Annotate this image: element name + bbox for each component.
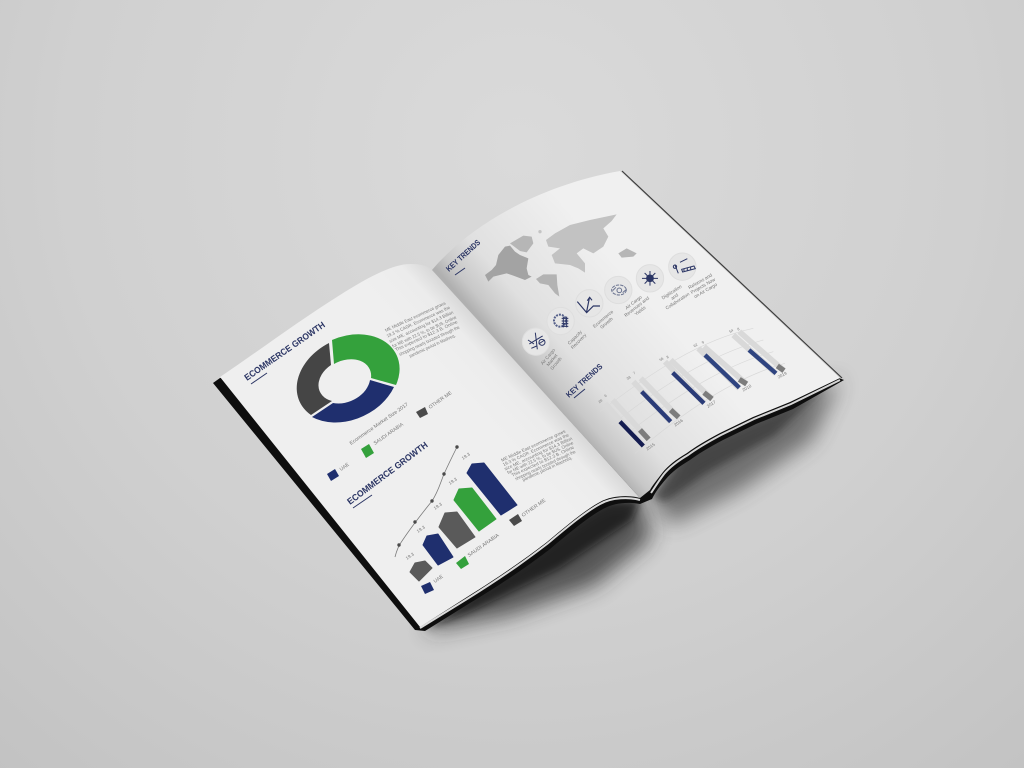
text block: intro 1: 19.3 % CAGR. Ecommerce was the bbox=[386, 305, 451, 338]
icon: growth bbox=[576, 290, 603, 317]
label: digitization bbox=[659, 282, 691, 311]
eurasia and africa bbox=[546, 214, 617, 273]
label: air cargo: Air Cargo bbox=[540, 347, 556, 366]
text block: intro 1: This expected to $12.3 B. Online bbox=[394, 319, 459, 352]
year labels: 2018 bbox=[741, 383, 753, 393]
bar values: 9 bbox=[701, 340, 705, 345]
year labels: 2015 bbox=[645, 442, 656, 451]
label: air cargo: Growth bbox=[549, 356, 563, 371]
text block: intro 2: shopping nearly boosted through the bbox=[514, 449, 577, 481]
legend: arrow bars: UAE bbox=[433, 573, 445, 585]
label: revenues: Yields bbox=[634, 305, 647, 317]
text block: intro 2 bbox=[500, 429, 577, 482]
legend: donut bbox=[327, 390, 454, 481]
text block: intro 2: for ME with 22.5 %, to be $US. Online bbox=[506, 440, 575, 475]
icon: revenue bbox=[605, 276, 632, 304]
heading: ecommerce growth 2: ECOMMERCE GROWTH bbox=[345, 440, 430, 507]
trend line bbox=[395, 445, 459, 557]
label: reforms: Reforms and bbox=[687, 272, 713, 290]
legend: arrow bars: OTHER ME bbox=[521, 497, 548, 519]
bar values bbox=[405, 451, 471, 561]
label: digitization: Digitization bbox=[661, 284, 683, 300]
label: ecommerce: Ecommerce bbox=[592, 309, 614, 329]
donut chart bbox=[297, 334, 400, 422]
panel: left page bbox=[220, 264, 640, 628]
text block: intro 1: pandemic period in Mashreq. bbox=[408, 333, 456, 358]
label: revenues bbox=[620, 291, 654, 322]
back cover edge bbox=[213, 300, 844, 631]
bar values: 54 bbox=[729, 328, 734, 334]
label: reforms: Projects Now bbox=[690, 277, 717, 295]
bar values: 19.3 bbox=[433, 501, 443, 511]
panel: right page bbox=[432, 171, 842, 498]
icon row bbox=[522, 253, 696, 355]
text block: intro 1: for ME with 22.5 %, to be $US. Online bbox=[391, 315, 458, 349]
year labels: 2016 bbox=[673, 418, 684, 427]
bar values: 38 bbox=[626, 375, 632, 381]
heading: key trends 1: KEY TRENDS bbox=[444, 238, 482, 273]
bar values: 19.3 bbox=[416, 524, 426, 534]
north america bbox=[485, 246, 532, 282]
label: ecommerce: Growth bbox=[599, 316, 614, 330]
label: digitization: and bbox=[670, 292, 679, 301]
icon: reforms bbox=[669, 253, 696, 280]
bar chart: key trends bbox=[598, 327, 788, 453]
label: air cargo: Market bbox=[546, 353, 559, 367]
legend: donut: OTHER ME bbox=[428, 390, 454, 411]
year labels bbox=[645, 370, 788, 451]
label: digitization: Collaboration bbox=[665, 291, 691, 311]
icon: capacity bbox=[547, 307, 574, 335]
legend: arrow bars bbox=[421, 497, 548, 594]
page right edge bbox=[622, 171, 842, 378]
text block: intro 1: ME Middle East ecommerce grows bbox=[384, 300, 447, 333]
gray bars bbox=[640, 366, 784, 439]
icon labels bbox=[540, 272, 719, 373]
text block: intro 2: 19.3 % CAGR. Ecommerce was the bbox=[502, 432, 570, 467]
icon: digitization bbox=[636, 265, 664, 292]
bar values: 28 bbox=[598, 399, 603, 404]
label: reforms: on Air Cargo bbox=[693, 282, 718, 299]
legend: donut: SAUDI ARABIA bbox=[373, 421, 405, 447]
text block: intro 1: shopping nearly boosted through the bbox=[398, 325, 461, 357]
label: revenues: Revenues and bbox=[623, 295, 650, 318]
bar values: 56 bbox=[659, 357, 664, 362]
page surface bbox=[220, 264, 640, 627]
bar values: 62 bbox=[693, 343, 698, 348]
page stack edge bbox=[651, 380, 840, 493]
legend: arrow bars: SAUDI ARABIA bbox=[467, 532, 501, 559]
label: reforms bbox=[687, 272, 719, 300]
text block: intro 1: size ME, accounting for $14.3 Billion bbox=[388, 310, 455, 344]
heading: key trends 2: KEY TRENDS bbox=[564, 362, 604, 399]
bar tracks bbox=[605, 332, 784, 447]
navy bars bbox=[620, 350, 776, 446]
arrow bar chart bbox=[410, 463, 517, 581]
chart caption: Ecommerce Market Size 2017 bbox=[349, 402, 410, 447]
text block: intro 2: pandemic period in Mashreq. bbox=[521, 455, 573, 482]
world map bbox=[485, 214, 637, 297]
australia bbox=[618, 248, 637, 258]
text block: intro 2: size ME, accounting for $14.3 Billion bbox=[503, 436, 574, 471]
label: capacity bbox=[566, 328, 588, 350]
bar values: 19.3 bbox=[448, 476, 458, 486]
label: air cargo bbox=[540, 347, 565, 373]
page surface bbox=[432, 171, 840, 498]
legend: donut: UAE bbox=[339, 461, 351, 473]
icon: air cargo bbox=[522, 328, 550, 355]
label: capacity: Capacity bbox=[567, 329, 583, 346]
year labels: 2017 bbox=[706, 399, 717, 409]
greenland bbox=[510, 236, 533, 252]
bar values: 19.3 bbox=[405, 551, 415, 561]
heading: ecommerce growth 1: ECOMMERCE GROWTH bbox=[242, 320, 327, 383]
bar values: 8 bbox=[666, 355, 670, 360]
bar values bbox=[598, 327, 740, 404]
bar values: 19.3 bbox=[461, 451, 471, 461]
bar values: 6 bbox=[604, 394, 608, 398]
text block: intro 1 bbox=[384, 300, 461, 358]
text block: intro 2: This expected to $12.3 B. Online bbox=[511, 445, 575, 478]
bar values: 8 bbox=[737, 327, 740, 332]
year labels: 2019 bbox=[777, 370, 788, 380]
text block: intro 2: ME Middle East ecommerce grows bbox=[500, 429, 567, 463]
page stack edge bbox=[420, 498, 640, 628]
bar values: 7 bbox=[632, 371, 636, 375]
grid lines bbox=[600, 328, 785, 453]
cast shadows bbox=[425, 380, 840, 632]
islands bbox=[538, 230, 542, 233]
label: revenues: Air Cargo bbox=[624, 294, 643, 310]
label: capacity: Recovery bbox=[570, 332, 588, 350]
south america bbox=[536, 274, 559, 297]
